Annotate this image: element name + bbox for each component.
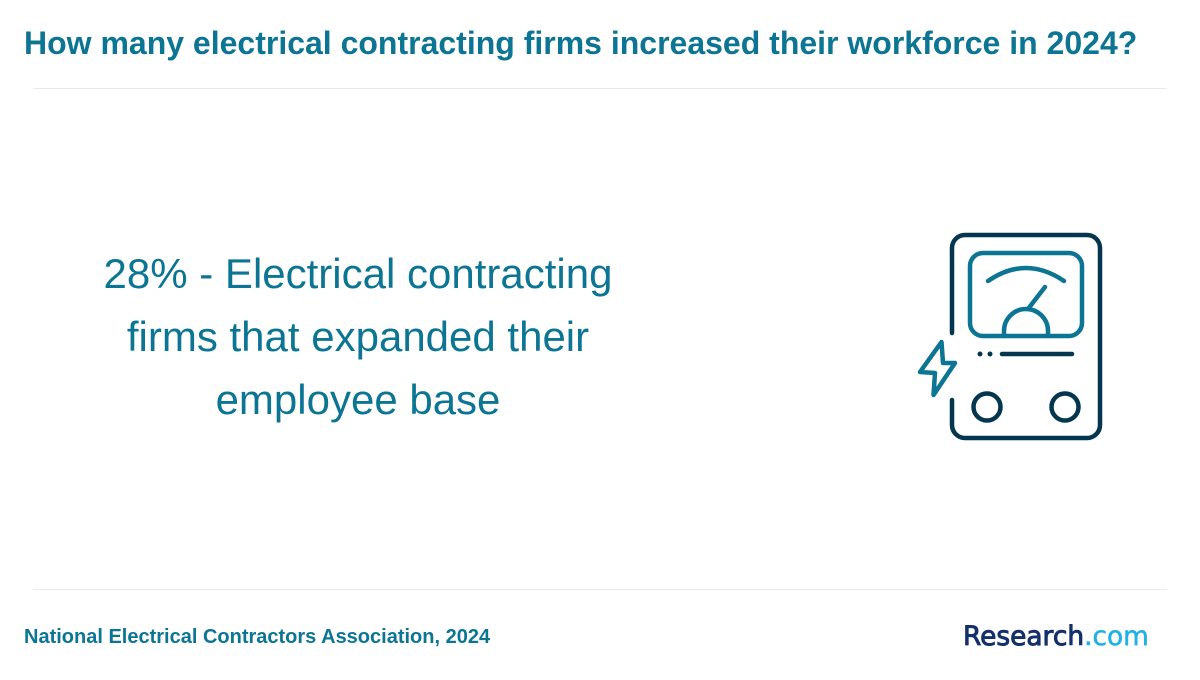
main statistic text: employee base [216, 376, 500, 423]
main statistic text: firms that expanded their [127, 313, 589, 360]
source: National Electrical Contractors Association, 2024 [24, 626, 490, 648]
main statistic text [104, 250, 612, 423]
meter body [952, 235, 1100, 438]
main statistic text: 28% - Electrical contracting [104, 250, 612, 297]
icon: electrical meter [918, 232, 1102, 440]
title: How many electrical contracting firms increased their workforce in 2024? [24, 25, 1137, 61]
logo: Research.com: Research.com [963, 621, 1149, 652]
meter screen and bolt [920, 253, 1082, 395]
indicator dots [978, 352, 992, 356]
